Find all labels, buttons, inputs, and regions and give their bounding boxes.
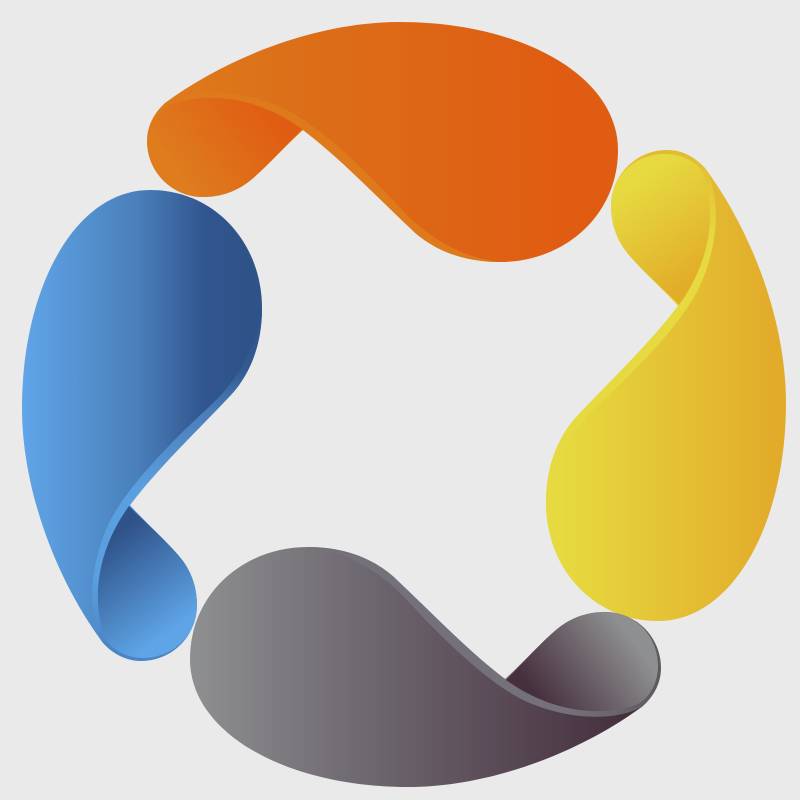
gray swirl bbox=[190, 547, 661, 787]
orange swirl bbox=[147, 22, 618, 262]
yellow swirl bbox=[546, 150, 786, 621]
blue swirl bbox=[22, 190, 262, 661]
